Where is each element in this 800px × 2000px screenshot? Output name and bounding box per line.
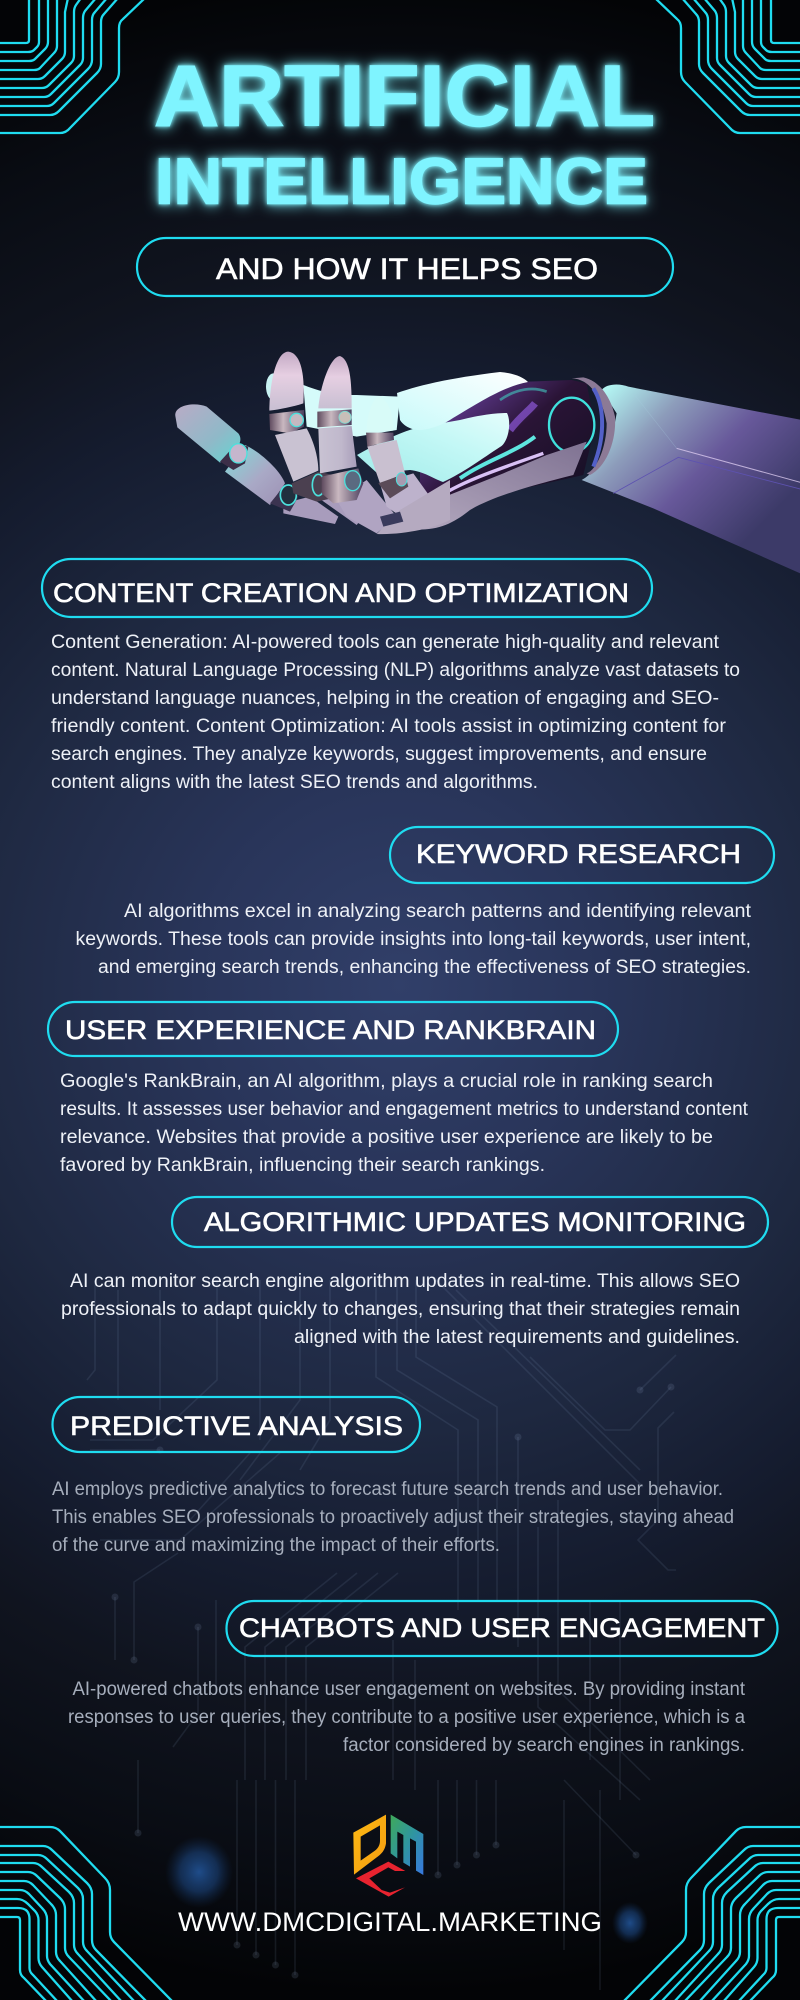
body text: content creation: content aligns with the latest SEO trends and algorithms.	[51, 772, 538, 793]
body text: predictive analysis: of the curve and maximizing the impact of their efforts.	[52, 1535, 500, 1556]
body text: keyword research: keywords. These tools can provide insights into long-tail keywords, user intent,	[76, 929, 751, 950]
subtitle pill: AND HOW IT HELPS SEO	[216, 253, 598, 286]
heading pill: user experience: USER EXPERIENCE AND RANKBRAIN	[65, 1015, 596, 1045]
heading pill: content creation	[42, 559, 652, 617]
title: ARTIFICIAL	[154, 48, 655, 144]
back of hand	[397, 372, 528, 430]
body text: content creation: search engines. They analyze keywords, suggest improvements, and ensure	[51, 744, 707, 765]
body text: content creation: Content Generation: AI-powered tools can generate high-quality and relevant	[51, 632, 720, 653]
heading pill: predictive analysis	[52, 1397, 420, 1452]
section: algorithmic updates monitoring	[61, 1197, 768, 1348]
website url: WWW.DMCDIGITAL.MARKETING	[178, 1907, 602, 1937]
forearm and palm	[400, 377, 800, 574]
heading pill: keyword research	[390, 827, 774, 883]
body text: chatbots: responses to user queries, they contribute to a positive user experience, which is a	[68, 1707, 745, 1728]
heading pill: keyword research: KEYWORD RESEARCH	[416, 839, 741, 869]
heading pill: chatbots: CHATBOTS AND USER ENGAGEMENT	[239, 1613, 765, 1643]
section: predictive analysis	[52, 1397, 734, 1556]
body text: keyword research: and emerging search trends, enhancing the effectiveness of SEO strategies.	[98, 957, 751, 978]
body text: keyword research	[76, 901, 752, 978]
section: chatbots and user engagement	[68, 1601, 778, 1756]
body text: chatbots: AI-powered chatbots enhance user engagement on websites. By providing instant	[72, 1679, 746, 1700]
body text: user experience: Google's RankBrain, an AI algorithm, plays a crucial role in ranking search	[60, 1071, 713, 1092]
body text: user experience: favored by RankBrain, influencing their search rankings.	[60, 1155, 545, 1176]
body text: algorithmic updates: AI can monitor search engine algorithm updates in real-time. This allows SEO	[70, 1271, 740, 1292]
logo: DMC	[353, 1815, 423, 1897]
thumb pad	[357, 413, 509, 482]
heading pill: predictive analysis: PREDICTIVE ANALYSIS	[70, 1411, 403, 1441]
fingers	[175, 352, 450, 534]
heading pill: chatbots	[226, 1601, 778, 1656]
subtitle pill	[137, 238, 673, 296]
body text: predictive analysis: This enables SEO professionals to proactively adjust their strategies, staying ahead	[52, 1507, 734, 1528]
heading pill: user experience	[48, 1002, 618, 1056]
circuit lines: bottom left corner	[0, 1827, 173, 2000]
section: user experience and rankbrain	[48, 1002, 749, 1176]
body text: content creation: content. Natural Language Processing (NLP) algorithms analyze vast datasets to	[51, 660, 740, 681]
section: content creation and optimization	[42, 559, 740, 793]
body text: chatbots: factor considered by search engines in rankings.	[343, 1735, 745, 1756]
body text: predictive analysis	[52, 1479, 734, 1556]
circuit lines: top left corner	[0, 0, 145, 133]
circuit board pattern	[87, 1280, 676, 1990]
title	[154, 48, 655, 218]
body text: chatbots	[68, 1679, 746, 1756]
body text: keyword research: AI algorithms excel in analyzing search patterns and identifying relevant	[124, 901, 752, 922]
glow: right blue	[612, 1902, 648, 1944]
body text: user experience: results. It assesses user behavior and engagement metrics to understand content	[60, 1099, 749, 1120]
heading pill: algorithmic updates: ALGORITHMIC UPDATES MONITORING	[204, 1207, 746, 1237]
body text: user experience	[60, 1071, 749, 1176]
glow: left blue	[165, 1836, 233, 1908]
body text: content creation: understand language nuances, helping in the creation of engaging and SEO-	[51, 688, 719, 709]
section: keyword research	[76, 827, 774, 978]
body text: predictive analysis: AI employs predictive analytics to forecast future search trends and user behavior.	[52, 1479, 723, 1500]
body text: content creation	[51, 632, 740, 793]
body text: algorithmic updates	[61, 1271, 740, 1348]
illustration: robot hand	[175, 352, 800, 574]
circuit lines: top right corner	[655, 0, 800, 133]
body text: content creation: friendly content. Content Optimization: AI tools assist in optimizing content for	[51, 716, 727, 737]
title: INTELLIGENCE	[155, 144, 648, 218]
body text: user experience: relevance. Websites that provide a positive user experience are likely to be	[60, 1127, 713, 1148]
body text: algorithmic updates: professionals to adapt quickly to changes, ensuring that their strategies remain	[61, 1299, 740, 1320]
circuit lines: bottom right corner	[623, 1827, 800, 2000]
body text: algorithmic updates: aligned with the latest requirements and guidelines.	[294, 1327, 740, 1348]
heading pill: content creation: CONTENT CREATION AND OPTIMIZATION	[53, 578, 629, 608]
heading pill: algorithmic updates	[172, 1197, 768, 1247]
